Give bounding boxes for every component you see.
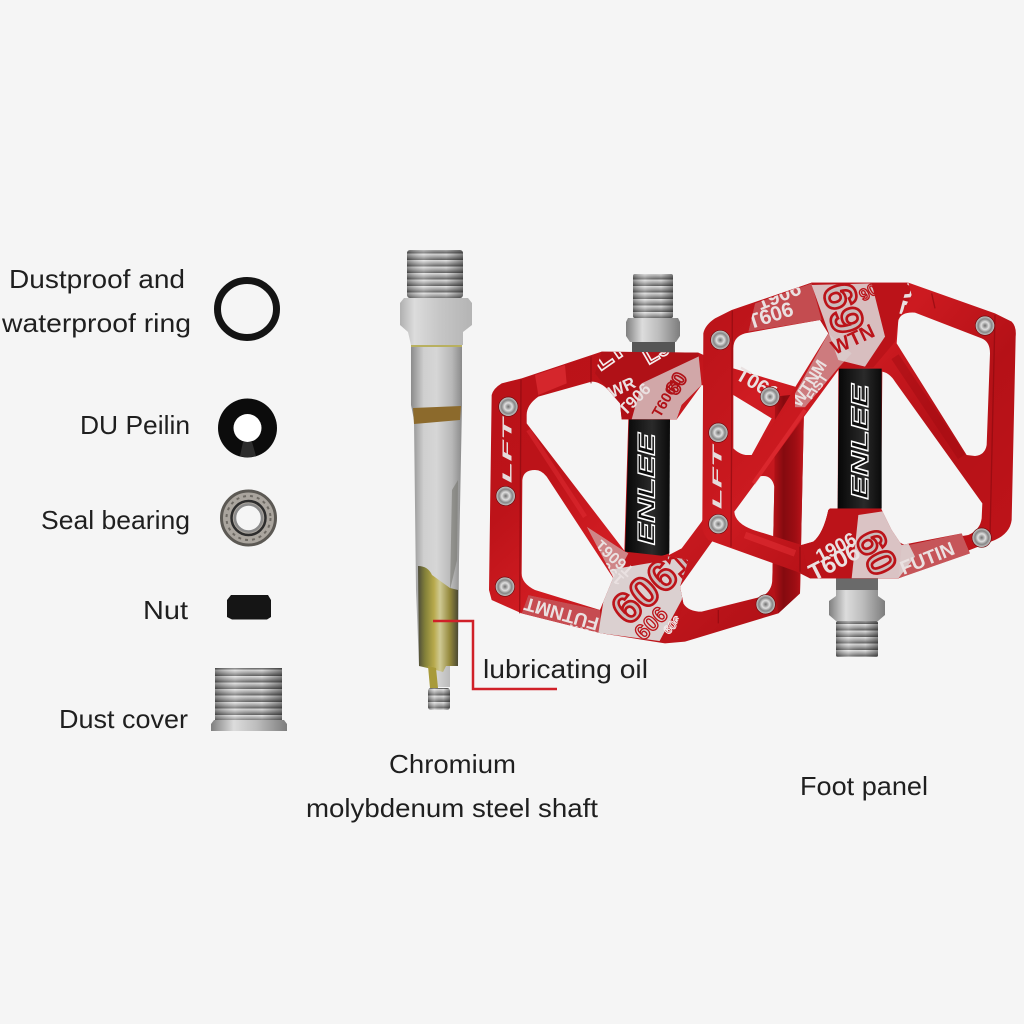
top hub graphics: FIST <box>803 371 831 403</box>
upper hub graphics: 60 <box>662 369 692 399</box>
lower hub graphics: 606 <box>661 613 685 637</box>
brand mark: LFT <box>711 443 725 509</box>
upper hub graphics <box>595 352 702 420</box>
top thread <box>407 250 463 298</box>
label: Seal bearing: Seal bearing <box>41 505 190 535</box>
bottom hub graphics: 09 <box>848 523 906 581</box>
lower hub graphics <box>522 527 688 641</box>
lubricated end <box>418 566 458 672</box>
nut neck <box>836 576 878 592</box>
icon: rubber ring <box>218 280 276 338</box>
chamfer line <box>520 357 718 623</box>
bottom hub graphics: 1906 <box>812 529 861 568</box>
strut highlight <box>753 410 805 483</box>
top hub graphics: WTN <box>828 320 878 360</box>
upper hub graphics: WR <box>605 373 639 402</box>
label: Foot panel: Foot panel <box>800 771 928 801</box>
upper right bar text: T061 <box>732 364 782 405</box>
top hub graphics: T606 <box>744 298 796 334</box>
icon: threaded dust cover <box>211 668 287 731</box>
grease band <box>413 406 461 424</box>
oil ring <box>411 345 462 347</box>
nut neck <box>632 342 675 354</box>
icon: DU washer <box>218 398 277 458</box>
top hub graphics <box>748 282 912 408</box>
lower bar highlight <box>745 535 795 553</box>
top hub graphics: 90 <box>856 279 881 305</box>
lower thread <box>836 621 878 657</box>
bottom hub graphics: T606 <box>804 538 865 587</box>
exploded pedal parts infographic <box>2 250 1016 822</box>
oil drip on tip <box>428 666 438 688</box>
side wall <box>772 393 804 613</box>
label: Dustproof and waterproof ring <box>1 264 191 338</box>
left pedal <box>489 352 804 644</box>
lower hub graphics: T6061 <box>593 536 638 579</box>
top hub graphics: AL <box>893 278 932 321</box>
bottom hub graphics <box>802 508 970 578</box>
label: Dustproof and waterproof ring: waterproof ring <box>1 308 191 338</box>
right pedal lower axle <box>829 576 885 657</box>
callout leader line <box>433 621 557 689</box>
bottom hub graphics: FUTIN <box>897 539 958 580</box>
screws <box>495 387 780 614</box>
brand mark: LFT <box>501 415 515 483</box>
black spindle body <box>838 369 882 509</box>
strut highlight <box>528 430 585 517</box>
top hub graphics: 1906 <box>753 277 804 315</box>
label: Dustproof and waterproof ring: Dustproof and <box>9 264 185 294</box>
collar <box>400 298 472 345</box>
chamfer lines <box>731 293 995 572</box>
highlight <box>535 365 567 395</box>
left pedal axle <box>626 274 680 354</box>
shaft assembly <box>400 250 472 710</box>
icon: sealed bearing <box>222 491 276 545</box>
lower hub graphics: FUTNMT <box>521 593 601 635</box>
lower nut <box>829 590 885 621</box>
steel shaft <box>411 345 462 687</box>
label: Chromium molybdenum steel shaft: Chromium <box>389 749 516 779</box>
upper nut <box>626 318 680 342</box>
label: Dust cover: Dust cover <box>59 704 188 734</box>
upper hub graphics: T906 <box>614 379 655 419</box>
lower hub graphics: 19061 <box>584 547 628 588</box>
black spindle body <box>625 419 670 557</box>
upper hub graphics: LT <box>585 331 632 377</box>
label: Chromium molybdenum steel shaft: molybdenum steel shaft <box>306 793 599 823</box>
tip thread <box>428 688 450 710</box>
label: DU Peilin: DU Peilin <box>80 410 190 440</box>
lower hub graphics: WTNM <box>565 620 626 656</box>
pedal frame <box>702 283 1016 578</box>
upper hub graphics: T6061 <box>650 376 684 420</box>
lower hub graphics: 6061 <box>602 535 705 634</box>
label: lubricating oil: lubricating oil <box>483 654 648 684</box>
ENLEE logo: ENLEE <box>633 432 660 545</box>
shaft smear <box>450 480 458 590</box>
lower hub graphics: 606 <box>629 602 673 645</box>
right strut shading <box>895 357 962 457</box>
ENLEE logo: ENLEE <box>847 383 874 499</box>
pedal frame <box>489 352 804 643</box>
top hub graphics: 69 <box>812 277 875 339</box>
label: Nut: Nut <box>143 595 189 625</box>
label: Chromium molybdenum steel shaft <box>306 749 599 823</box>
icon: hex nut <box>227 595 271 620</box>
upper hub graphics: L9 <box>638 333 674 369</box>
right pedal <box>702 277 1016 587</box>
upper thread <box>633 274 673 318</box>
top hub graphics: WTNM <box>787 356 831 410</box>
screws <box>709 316 995 547</box>
